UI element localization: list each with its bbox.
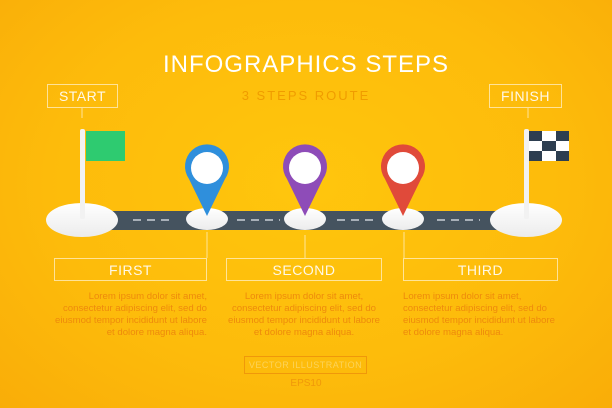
text: eps10: EPS10 — [290, 378, 322, 389]
step: first: FIRST — [109, 262, 152, 278]
step: third: THIRD — [458, 262, 503, 278]
text: third: Lorem ipsum dolor sit amet, consectetur adipiscing elit, sed do eiusmod tempor incididunt ut labore et dolore magna aliqua. — [403, 291, 555, 338]
badge: vector illustration — [244, 356, 367, 374]
label: finish — [489, 84, 562, 108]
step: second — [226, 258, 382, 281]
step: second: SECOND — [273, 262, 335, 278]
step: first — [54, 258, 207, 281]
finish base and flag — [490, 129, 569, 237]
label: start — [47, 84, 118, 108]
pin: blue — [185, 144, 229, 230]
text: first: Lorem ipsum dolor sit amet, consectetur adipiscing elit, sed do eiusmod tempor incididunt ut labore et dolore magna aliqua. — [55, 291, 207, 338]
label: finish: FINISH — [501, 88, 550, 104]
step: third — [403, 258, 558, 281]
badge: vector illustration: VECTOR ILLUSTRATION — [249, 360, 362, 370]
pin: purple — [283, 144, 327, 230]
pin: red — [381, 144, 425, 230]
start base and flag — [46, 129, 125, 237]
subtitle: 3 STEPS ROUTE — [242, 88, 370, 103]
title: INFOGRAPHICS STEPS — [163, 51, 449, 78]
road — [110, 211, 510, 230]
label: start: START — [59, 88, 106, 104]
text: second: Lorem ipsum dolor sit amet, consectetur adipiscing elit, sed do eiusmod tempor incididunt ut labore et dolore magna aliqua. — [228, 291, 380, 338]
